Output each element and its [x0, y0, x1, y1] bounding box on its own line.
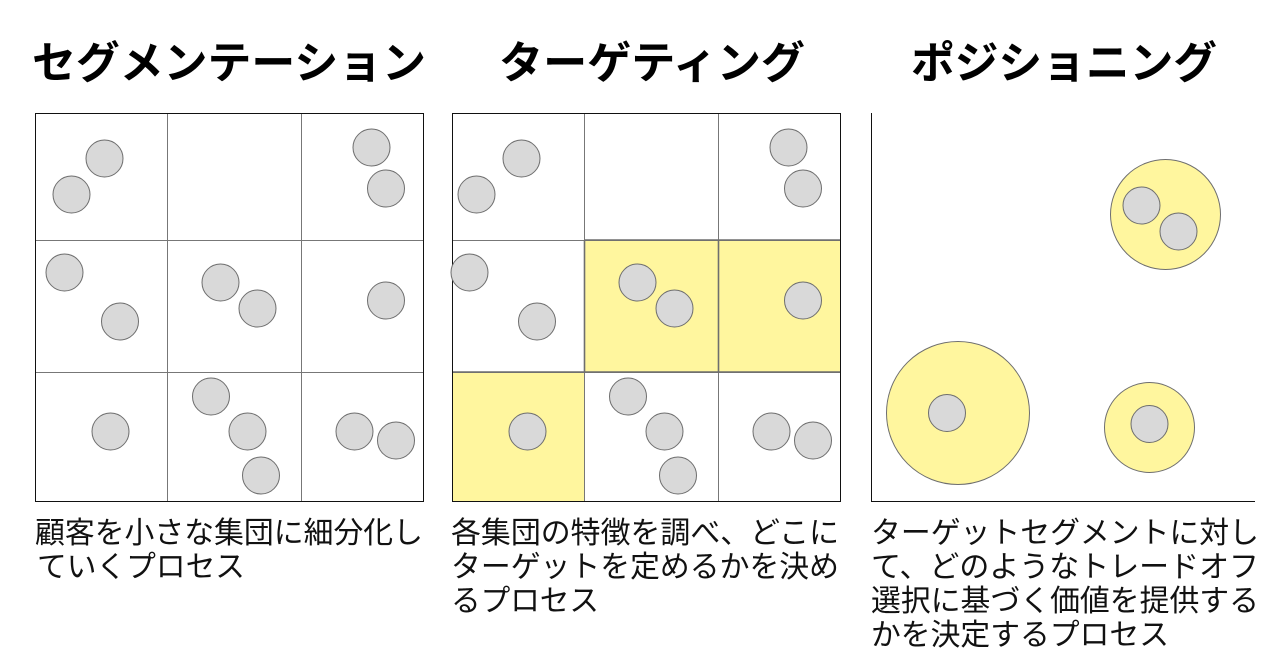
description: targeting: るプロセス [451, 585, 599, 618]
description: positioning: て、どのようなトレードオフ [871, 551, 1259, 584]
position bubble: bottom left [886, 342, 1030, 484]
panel: positioning [871, 39, 1259, 652]
heading: positioning: ポジショニング [911, 39, 1217, 88]
panel: segmentation [32, 39, 426, 584]
customer circles: segmentation [46, 129, 414, 494]
grid: targeting matrix [452, 113, 840, 502]
description: positioning: ターゲットセグメントに対し [871, 517, 1259, 550]
panel: targeting [451, 39, 840, 618]
description: positioning: 選択に基づく価値を提供する [871, 585, 1259, 618]
description: positioning: かを決定するプロセス [871, 619, 1169, 652]
position bubble: bottom right [1104, 382, 1194, 472]
grid: segmentation matrix [35, 113, 424, 502]
description: positioning [871, 517, 1259, 652]
position bubble: top right [1110, 160, 1220, 270]
heading: segmentation: セグメンテーション [32, 39, 426, 88]
description: targeting [451, 517, 839, 618]
positioning map axes [872, 113, 1255, 502]
description: segmentation: ていくプロセス [37, 551, 245, 584]
description: targeting: ターゲットを定めるかを決め [451, 551, 839, 584]
description: segmentation [35, 517, 423, 584]
description: targeting: 各集団の特徴を調べ、どこに [451, 517, 839, 550]
highlighted target cells [453, 240, 840, 501]
customer circles: targeting [451, 129, 832, 494]
heading: targeting: ターゲティング [499, 39, 805, 88]
description: segmentation: 顧客を小さな集団に細分化し [35, 517, 423, 550]
